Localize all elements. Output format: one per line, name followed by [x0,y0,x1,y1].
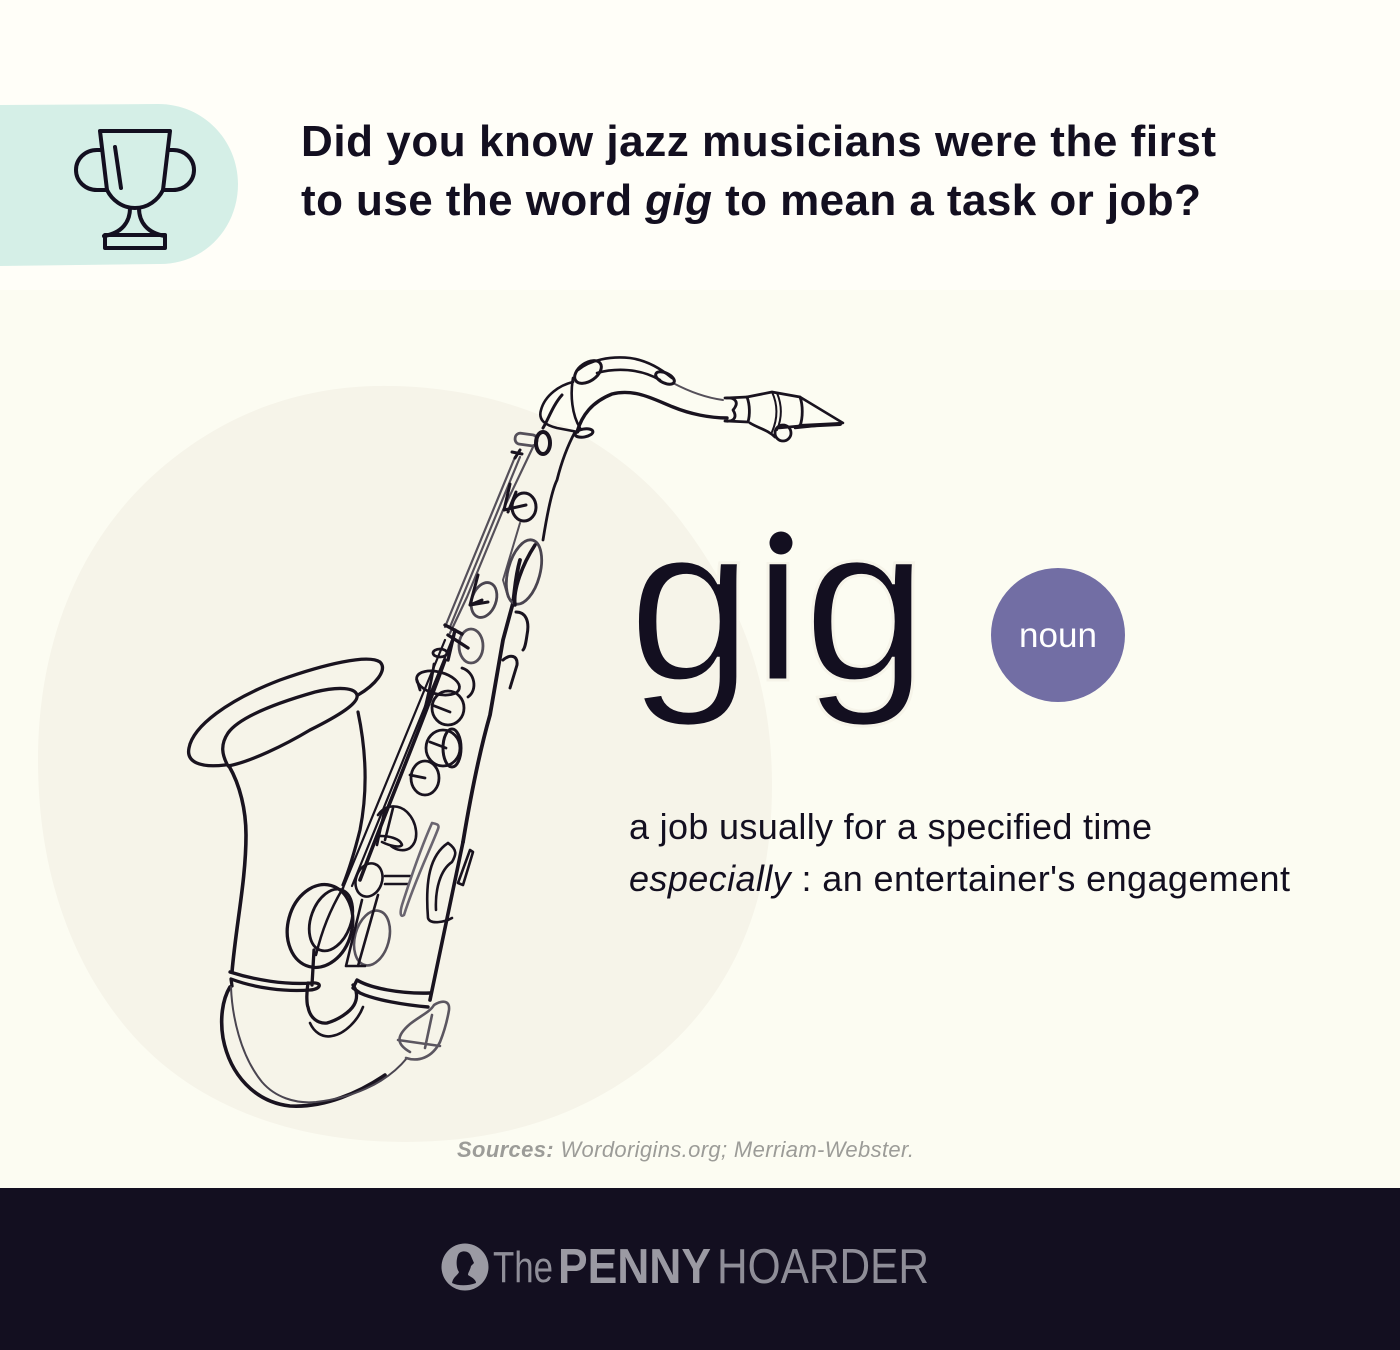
logo: The Penny Hoarder: PENNY [558,1240,711,1294]
main tube right edge [430,432,575,1000]
left key rods [343,447,533,888]
definition text: especially : an entertainer's engagement [629,858,1290,899]
headline [301,117,1216,225]
bell body [229,712,365,972]
mouthpiece [725,392,843,441]
footer bar [0,1188,1400,1350]
logo: The Penny Hoarder: HOARDER [717,1240,929,1294]
logo: The Penny Hoarder: The [493,1243,553,1292]
definition text [629,806,1290,899]
panel: definition background [0,290,1400,1188]
bell rim [189,659,382,766]
icon: penny portrait [442,1244,488,1290]
lower bowl [222,987,407,1106]
body bands [230,972,430,1007]
icon: saxophone line drawing [189,356,843,1106]
word: gig: gig [628,480,928,728]
logo: The Penny Hoarder [442,1240,929,1294]
large octave key [278,877,362,975]
noun badge: noun [1019,616,1097,655]
icon: trophy [76,131,194,248]
background blob [38,386,772,1142]
headline: to use the word gig to mean a task or job? [301,176,1201,225]
inner bow [307,950,363,1036]
noun badge [991,568,1125,702]
headline: Did you know jazz musicians were the first [301,117,1216,166]
lower keys [346,806,473,969]
sources: Sources: Wordorigins.org; Merriam-Webster. [457,1137,914,1162]
stacked finger keys [410,432,550,795]
neck [540,356,727,439]
header badge with trophy icon [0,104,238,266]
definition text: a job usually for a specified time [629,806,1152,847]
bow guard keys [398,1002,449,1059]
